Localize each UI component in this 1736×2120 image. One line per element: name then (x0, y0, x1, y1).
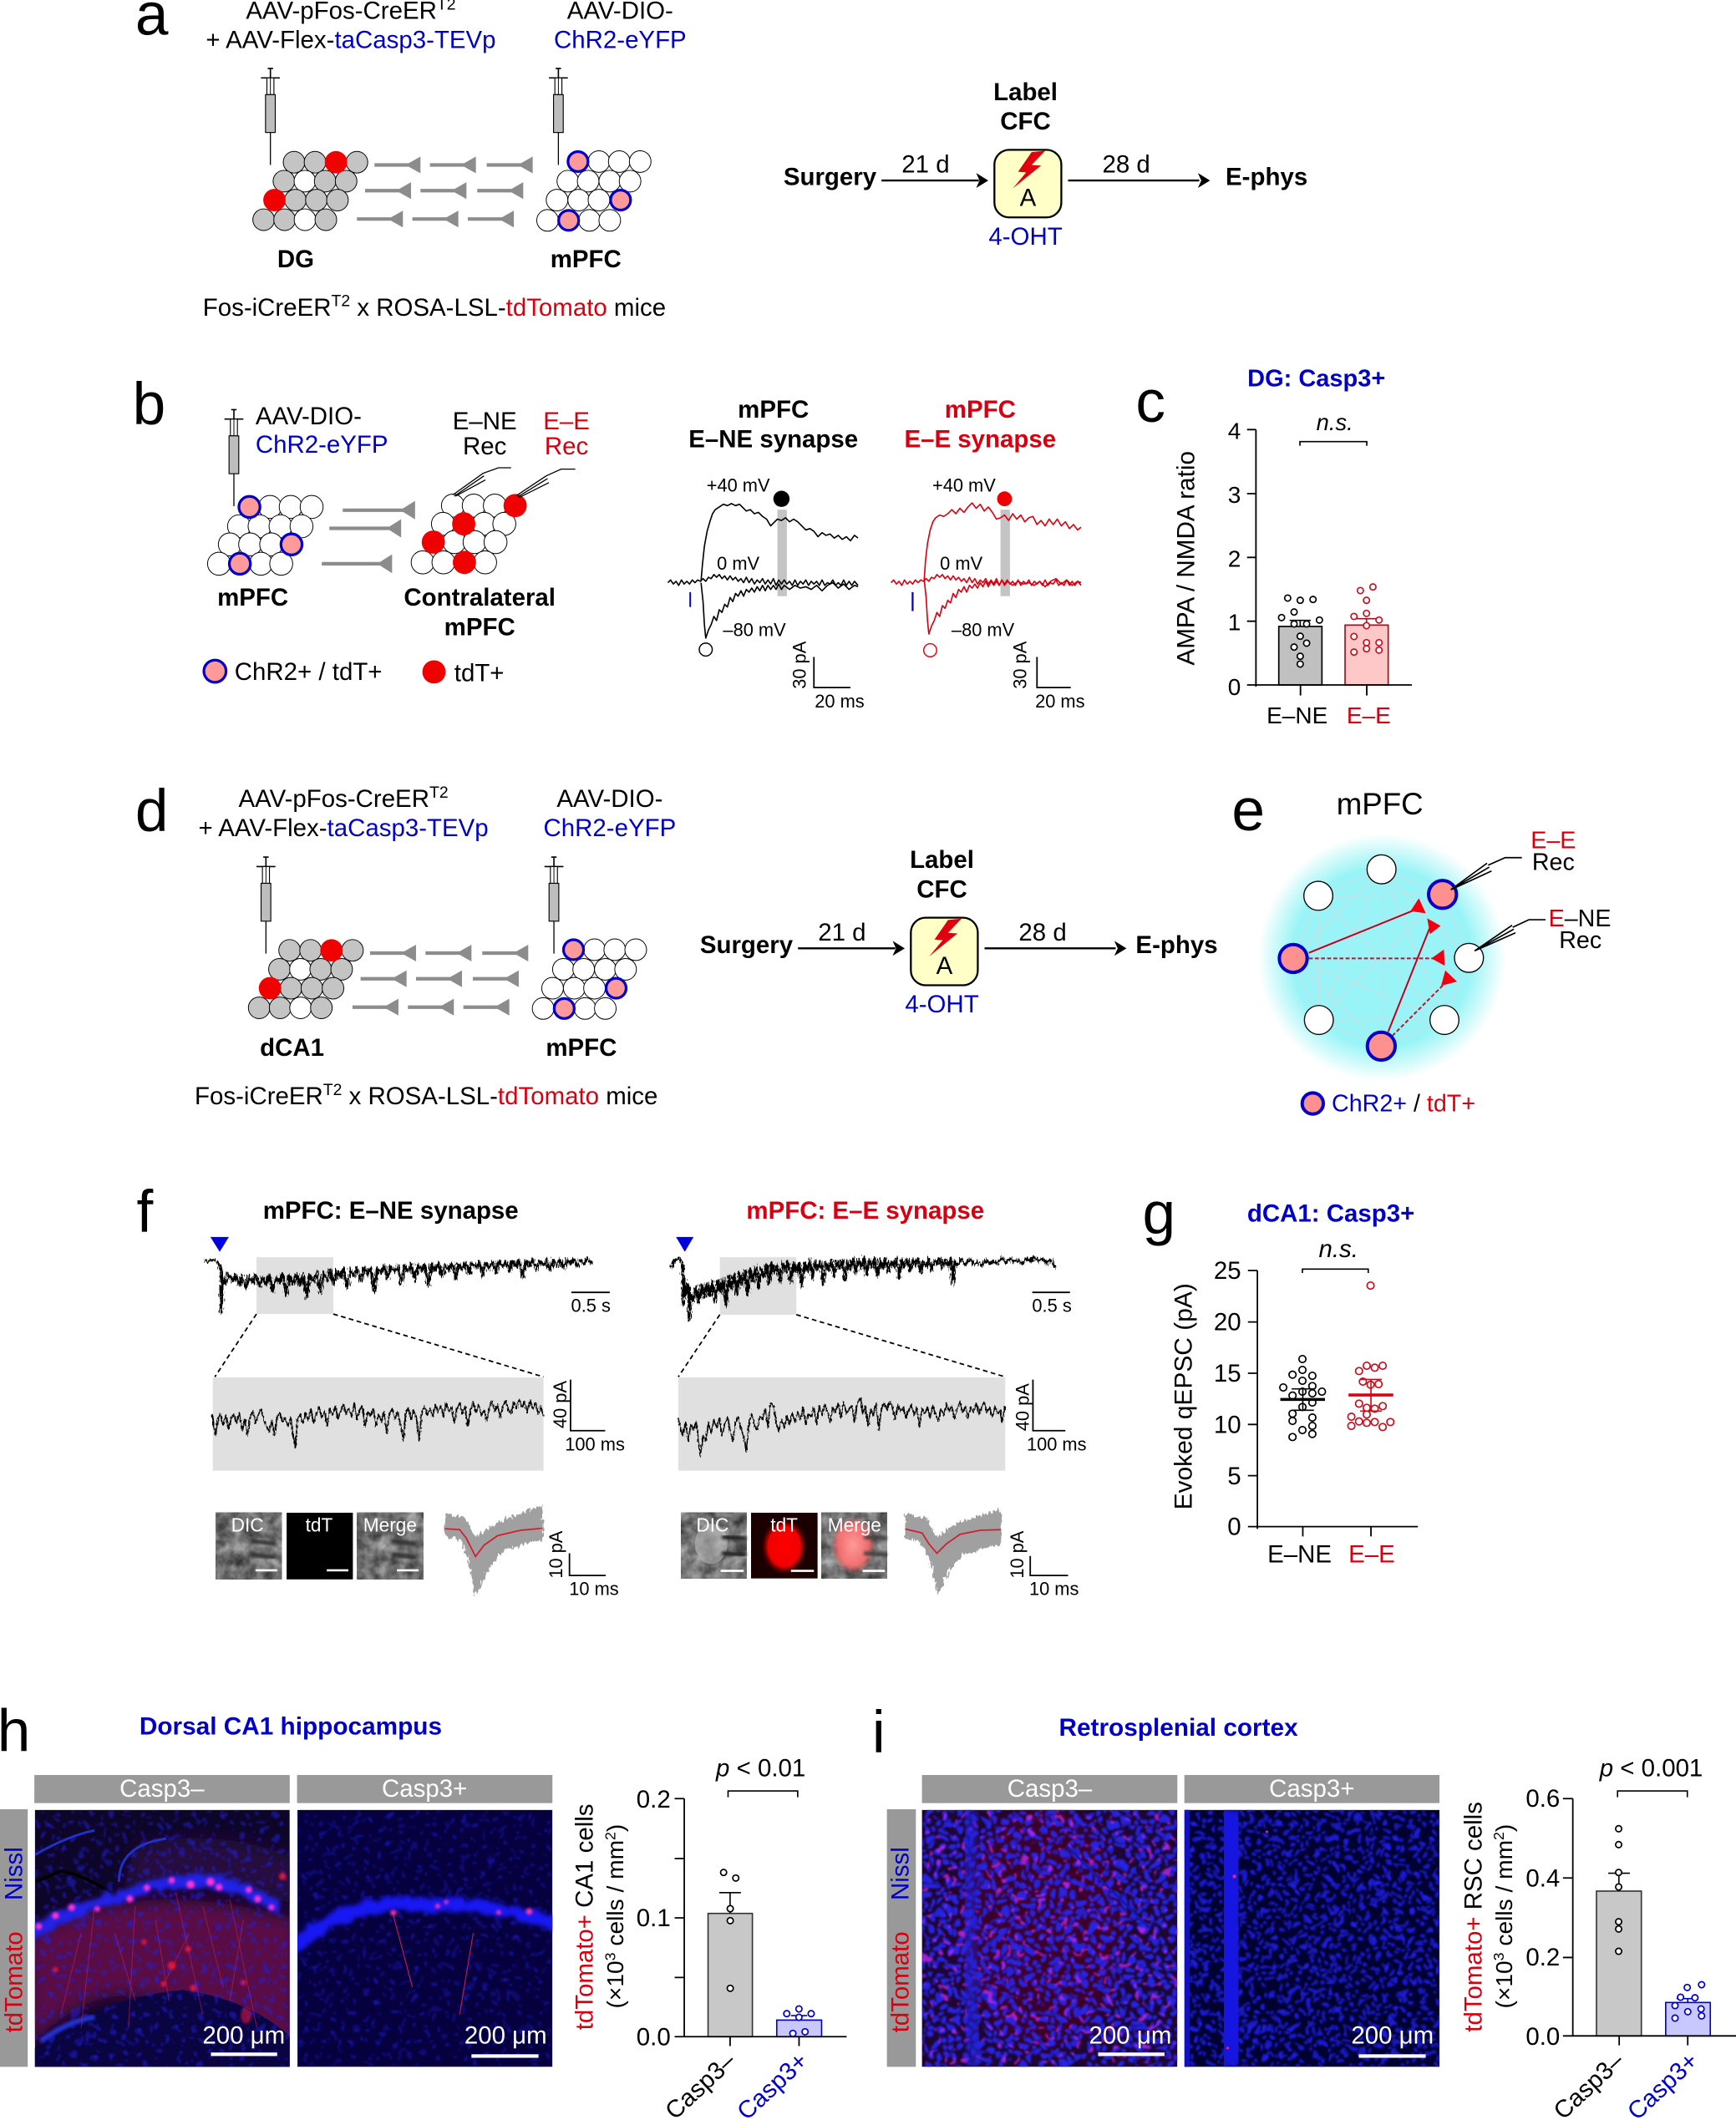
Flex virus text: + AAV-Flex-taCasp3-TEVp (206, 26, 496, 53)
panel f: E-E column (672, 1197, 1087, 1600)
data points E-E (1351, 584, 1382, 655)
axes (1248, 1270, 1418, 1536)
virus text: AAV-pFos-CreER (238, 785, 429, 813)
voltage label: +40 mV (932, 474, 996, 495)
y tick labels: 15 (1214, 1360, 1241, 1387)
panel g: scatter chart (1170, 1200, 1418, 1569)
axes (675, 1798, 846, 2046)
data points E-NE (1280, 1356, 1326, 1441)
panel i side label: Nissl (887, 1847, 915, 1900)
scale label: 10 ms (1029, 1579, 1079, 1600)
scale bar (814, 657, 850, 687)
scale label: 30 pA (789, 641, 810, 689)
scale label: 0.5 s (571, 1296, 611, 1316)
y axis label: Evoked qEPSC (pA) (1170, 1283, 1198, 1509)
mouse line caption: x ROSA-LSL- (350, 294, 506, 322)
panel b: recording schematic (204, 403, 590, 687)
error bar blue (791, 2016, 807, 2020)
mean and error E-NE (1281, 1389, 1325, 1410)
light pulse tick (911, 592, 913, 611)
merge image: Merge (363, 1514, 417, 1536)
y axis label line 2: ) (602, 1824, 628, 1832)
mPFC label: mPFC (546, 1034, 617, 1062)
axes (1563, 1798, 1736, 2046)
event waveforms (444, 1505, 543, 1595)
Rec red label: Rec (545, 433, 588, 460)
panel i side label (887, 1809, 916, 2067)
recording pipettes (453, 468, 576, 498)
legend: ChR2 (204, 660, 226, 682)
projections (353, 945, 528, 1016)
y tick labels: 10 (1214, 1412, 1241, 1439)
y ticks labels: 0 (1228, 674, 1241, 700)
scale label: 40 pA (1013, 1383, 1033, 1431)
virus text: AAV-DIO- (256, 403, 362, 430)
x label: E–E (1348, 1541, 1395, 1569)
light pulse tick (689, 592, 691, 607)
bar E-E (1345, 625, 1388, 685)
y tick labels: 0.1 (637, 1904, 671, 1932)
0 mV trace (667, 575, 858, 586)
voltage label: 0 mV (940, 553, 983, 574)
panel a E-phys label: E-phys (1226, 164, 1307, 191)
legend text: ChR2+ / tdT+ (235, 658, 383, 686)
analysis window bar (1001, 510, 1010, 596)
legend text tdT: tdT+ (454, 660, 505, 687)
legend marker (1302, 1093, 1323, 1114)
scale label: 100 ms (565, 1434, 625, 1455)
axes (1247, 429, 1412, 696)
zoom guide lines (678, 1315, 1005, 1377)
legend: tdT (423, 660, 445, 683)
panel f label: f (136, 1179, 153, 1245)
panel d E-phys label: E-phys (1135, 931, 1218, 959)
icon: syringe dCA1 (256, 857, 276, 954)
scale label: 10 ms (569, 1579, 619, 1600)
tdT image (287, 1513, 353, 1580)
bar Casp3+ (777, 2020, 821, 2036)
filled marker (997, 491, 1012, 506)
projection arrows (322, 501, 415, 573)
bar Casp3- (708, 1914, 753, 2036)
light stimulus marker (211, 1237, 229, 1252)
panel i heading: Retrosplenial cortex (1058, 1714, 1298, 1742)
y axis label line 2: 2 (602, 1832, 618, 1840)
DIC image: DIC (231, 1514, 264, 1536)
voltage label: 0 mV (717, 553, 760, 574)
mPFC cluster (532, 939, 647, 1019)
x label: E–NE (1266, 702, 1327, 728)
open marker (699, 643, 713, 656)
panel c label: c (1135, 369, 1165, 435)
panel d label: d (135, 779, 168, 844)
micrograph: RSC Casp3+ (1185, 1808, 1439, 2067)
scale: 200 um: 200 μm (1351, 2022, 1434, 2050)
non-engram cells (1304, 855, 1484, 1034)
mPFC virus text: AAV-DIO- (556, 785, 662, 813)
y axis label: AMPA / NMDA ratio (1172, 451, 1200, 666)
scale label: 10 pA (1007, 1530, 1028, 1579)
data points E-NE (1278, 595, 1322, 667)
y axis label: tdTomato+ CA1 cells (571, 1803, 599, 2030)
y ticks labels (1228, 418, 1241, 700)
y axis label line 2: 3 (602, 1952, 618, 1960)
points Casp3+ (784, 2006, 815, 2036)
E-E rec label: E–E (543, 408, 590, 435)
Rec label: Rec (463, 433, 506, 460)
zoom guide lines (215, 1314, 544, 1377)
long trace (672, 1257, 1055, 1320)
voltage label: –80 mV (723, 619, 786, 640)
0 mV trace (891, 575, 1081, 586)
heading line 2: E–E synapse (904, 426, 1056, 454)
significance bracket (1300, 442, 1367, 446)
thick mean E-NE (1281, 1398, 1325, 1400)
y tick labels (1214, 1257, 1241, 1541)
scale bar (1033, 1380, 1065, 1431)
scale label: 20 ms (1035, 691, 1085, 712)
panel a: viral injection schematic (203, 0, 687, 322)
panel i column header: Casp3– (1008, 1775, 1093, 1803)
Rec label: Rec (1559, 927, 1601, 954)
connection arrows (1309, 898, 1457, 1036)
heading: mPFC (945, 396, 1016, 423)
chart title: DG: Casp3+ (1247, 366, 1385, 393)
DG cell cluster (253, 151, 368, 231)
y tick labels (637, 1786, 671, 2052)
engram cells (1279, 880, 1456, 1060)
y axis label line 2: (×10 (1491, 1960, 1517, 2008)
enlarged trace (212, 1399, 544, 1448)
event waveforms (906, 1509, 1001, 1595)
y axis label line 2: 2 (1490, 1832, 1507, 1840)
mouse line caption: tdTomato mice (498, 1083, 657, 1110)
bar Casp3+ (1666, 2002, 1710, 2036)
panel d timeline (700, 846, 1126, 1018)
ChR2 text: ChR2-eYFP (256, 431, 388, 459)
points Casp3- (1616, 1826, 1622, 1955)
error bar blue (1677, 1999, 1698, 2002)
y ticks labels: 3 (1228, 482, 1241, 508)
scale label: 0.5 s (1032, 1296, 1072, 1316)
mPFC label: mPFC (551, 246, 622, 273)
points Casp3- (721, 1869, 739, 1991)
scale bar (571, 1380, 605, 1431)
panel i column header (1185, 1775, 1439, 1803)
tdT image (751, 1513, 818, 1579)
panel g label: g (1143, 1181, 1175, 1247)
bar E-NE (1279, 626, 1322, 685)
scale bar (571, 1291, 610, 1293)
panel i side label: tdTomato (887, 1931, 915, 2032)
y tick labels: 0.2 (637, 1786, 671, 1813)
y ticks labels: 1 (1228, 610, 1241, 636)
highlight window (256, 1257, 333, 1314)
merge image (821, 1513, 887, 1579)
y tick labels: 25 (1214, 1257, 1241, 1285)
scale label: 40 pA (550, 1381, 571, 1428)
scale: 200 um: 200 μm (202, 2022, 285, 2050)
tdT image: tdT (770, 1514, 798, 1536)
panel label: e (1231, 777, 1265, 844)
E-NE label: E–NE (1549, 905, 1611, 932)
dCA1 cluster (248, 939, 363, 1018)
panel d: schematic (195, 784, 676, 1110)
voltage label: +40 mV (707, 474, 770, 495)
open marker (924, 644, 937, 657)
pipettes (1451, 858, 1546, 951)
mouse line caption: tdTomato mice (506, 294, 666, 322)
y axis label line 2: ) (1491, 1824, 1517, 1832)
E-E label: E–E (1530, 828, 1576, 855)
y axis label: tdTomato+ RSC cells (1459, 1802, 1487, 2032)
scale: 200 um: 200 μm (1089, 2022, 1171, 2050)
contralateral label: Contralateral (404, 584, 556, 611)
mouse line caption: T2 (332, 292, 350, 311)
ChR2 virus text: ChR2-eYFP (554, 26, 687, 53)
scale: 200 um: 200 μm (464, 2022, 547, 2050)
significance bracket (728, 1791, 798, 1798)
mouse line caption: Fos-iCreER (195, 1083, 323, 1110)
panel h side label: tdTomato (1, 1931, 28, 2032)
scale label: 10 pA (546, 1530, 566, 1579)
panel i column header (922, 1775, 1177, 1803)
y axis label line 2: cells / mm (602, 1840, 628, 1952)
DIC image (216, 1513, 282, 1580)
scale label: 30 pA (1009, 641, 1030, 689)
long trace (204, 1259, 592, 1312)
mouse line caption: Fos-iCreER (203, 294, 332, 322)
bar chart: CA1 counts (571, 1755, 846, 2120)
enlarged window (213, 1377, 544, 1471)
y axis label line 2: (×10 (602, 1960, 628, 2008)
panel c: AMPA/NMDA bar chart (1172, 366, 1412, 728)
enlarged trace (678, 1397, 1005, 1456)
x label: E–NE (1267, 1541, 1332, 1569)
scale label: 20 ms (815, 691, 865, 712)
thick mean E-E (1348, 1394, 1393, 1396)
icon: syringe DG (261, 68, 280, 165)
title: mPFC (1337, 787, 1424, 821)
error bars red (1356, 619, 1377, 625)
tdT image: tdT (306, 1514, 332, 1536)
DG label: DG (277, 246, 314, 273)
scale label: 100 ms (1027, 1434, 1087, 1455)
data points E-E (1348, 1282, 1393, 1431)
-80 mV trace (924, 579, 1081, 634)
merge image (357, 1513, 424, 1580)
mPFC label: mPFC (217, 584, 288, 611)
network lines (1293, 870, 1469, 1046)
mouse line caption: x ROSA-LSL- (342, 1083, 498, 1110)
heading line 2: E–NE synapse (688, 426, 858, 454)
mPFC injected cells (207, 495, 323, 576)
x label: E–E (1347, 702, 1391, 728)
contralateral mPFC label: mPFC (444, 614, 515, 642)
panel h column header (34, 1775, 290, 1803)
scale bar (1037, 657, 1071, 687)
-80 mV trace (701, 583, 858, 638)
panel b traces: E-E (891, 396, 1085, 712)
dCA1 label: dCA1 (260, 1034, 324, 1062)
y tick labels: 0.4 (1525, 1864, 1560, 1892)
mouse line caption: T2 (323, 1081, 342, 1099)
icon: syringe (225, 409, 243, 506)
error bar (1608, 1874, 1630, 1891)
mPFC cell cluster (536, 150, 651, 231)
y tick labels: 0.2 (1525, 1944, 1560, 1971)
y ticks labels: 2 (1228, 545, 1241, 571)
panel a timeline (784, 79, 1210, 251)
icon: syringes and clusters (248, 857, 647, 1019)
error bars (1290, 621, 1311, 626)
+40 mV trace (924, 503, 1081, 581)
icon: syringe mPFC (545, 857, 563, 954)
panel h side label: Nissl (1, 1847, 28, 1900)
panel h heading: Dorsal CA1 hippocampus (140, 1712, 442, 1740)
E-NE rec label: E–NE (453, 408, 517, 435)
y axis label line 2: cells / mm (1491, 1840, 1517, 1952)
y tick labels: 20 (1214, 1309, 1241, 1336)
significance bracket (1302, 1269, 1368, 1273)
cyan glow (1258, 834, 1505, 1081)
panel b traces: E-NE (667, 396, 865, 712)
p value: p < 0.01 (715, 1755, 805, 1783)
chart title: dCA1: Casp3+ (1247, 1200, 1414, 1228)
y tick labels: 0.6 (1525, 1785, 1560, 1813)
highlight window (720, 1257, 796, 1315)
flex virus text: + AAV-Flex-taCasp3-TEVp (198, 814, 489, 842)
y tick labels: 0.0 (637, 2024, 671, 2052)
panel i column header: Casp3+ (1269, 1775, 1354, 1803)
scale bar (570, 1554, 606, 1575)
DIC image: DIC (696, 1514, 728, 1536)
panel f: E-NE column (204, 1197, 625, 1600)
points Casp3+ (1672, 1981, 1704, 2021)
significance bracket (1617, 1791, 1688, 1798)
panel i label: i (872, 1700, 886, 1766)
+40 mV trace (701, 504, 858, 581)
y tick labels: 0.0 (1525, 2023, 1560, 2051)
virus text: T2 (429, 784, 449, 802)
scale bar (1033, 1291, 1070, 1293)
merge image: Merge (828, 1514, 881, 1536)
icon: syringe mPFC (549, 68, 568, 165)
panel b label: b (133, 372, 165, 438)
panel h column header: Casp3– (119, 1775, 205, 1803)
bar chart: RSC counts (1459, 1755, 1736, 2120)
bar Casp3- (1596, 1891, 1642, 2036)
scale bar (1030, 1556, 1069, 1575)
significance label: n.s. (1317, 409, 1353, 435)
mean and error E-E (1360, 1379, 1382, 1411)
analysis window bar (778, 510, 787, 596)
micrograph: dorsal CA1 Casp3- (27, 1810, 297, 2075)
enlarged window (678, 1377, 1005, 1471)
voltage label: –80 mV (952, 619, 1015, 640)
ChR2 text: ChR2-eYFP (544, 814, 676, 842)
y tick labels: 5 (1227, 1463, 1241, 1490)
panel h column header: Casp3+ (382, 1775, 467, 1803)
p value: p < 0.001 (1599, 1755, 1703, 1783)
legend text: ChR2+ / tdT+ (1332, 1091, 1475, 1118)
micrograph: RSC Casp3- (922, 1805, 1177, 2067)
column heading: mPFC: E–E synapse (746, 1197, 984, 1225)
panel h column header (297, 1775, 552, 1803)
synaptic projections (357, 156, 533, 227)
contralateral cells (411, 494, 527, 574)
column heading: mPFC: E–NE synapse (263, 1197, 519, 1225)
error bar (719, 1893, 741, 1914)
significance label: n.s. (1318, 1235, 1358, 1263)
y axis label line 2: 3 (1490, 1952, 1507, 1960)
y ticks labels: 4 (1228, 418, 1241, 444)
y tick labels: 0 (1227, 1514, 1241, 1541)
heading: mPFC (738, 396, 809, 423)
panel e: mPFC network (1231, 777, 1611, 1118)
light stimulus marker (676, 1237, 693, 1252)
panel h side label (0, 1809, 28, 2067)
micrograph: dorsal CA1 Casp3+ (292, 1810, 557, 2067)
filled marker (774, 491, 789, 507)
DIC image (681, 1513, 747, 1579)
Rec label: Rec (1532, 850, 1575, 876)
y tick labels (1525, 1785, 1560, 2051)
